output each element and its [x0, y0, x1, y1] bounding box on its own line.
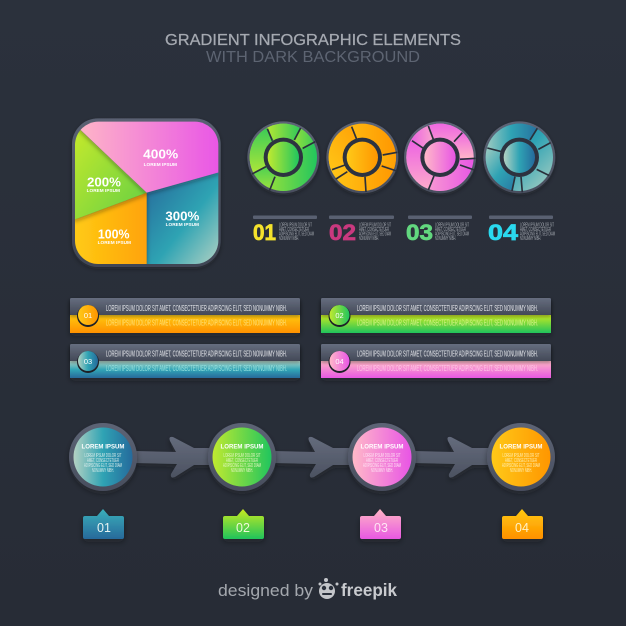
banner 03: LOREM IPSUM DOLOR SIT AMET, CONSECTETUER ADIPISCING ELIT, SED NONUMMY NIBH.: [106, 363, 287, 373]
legend 02: ADIPISCING ELIT, SED DIAM: [359, 232, 391, 238]
tag 02: [223, 509, 264, 539]
tag 03: [360, 509, 401, 539]
banner 02: 02: [335, 311, 344, 320]
legend 03: [406, 216, 472, 245]
panel: pie chart square: [72, 118, 221, 267]
label: 100%: 100%: [98, 227, 129, 241]
step circle 3: ADIPISCING ELIT, SED DIAM: [363, 463, 401, 469]
legend 01: [253, 216, 317, 245]
label: 100%: LOREM IPSUM: [98, 240, 131, 246]
legend 03: LOREM IPSUM DOLOR SIT: [435, 222, 469, 228]
donut 3: [404, 121, 476, 196]
banner 03: LOREM IPSUM DOLOR SIT AMET, CONSECTETUER ADIPISCING ELIT, SED NONUMMY NIBH.: [106, 348, 287, 358]
tag 03: 03: [374, 521, 388, 535]
legend 04: ADIPISCING ELIT, SED DIAM: [520, 232, 555, 238]
tag 02: 02: [236, 521, 250, 535]
step circle 1: [69, 423, 137, 491]
step circle 4: AMET, CONSECTETUER: [505, 458, 537, 464]
tag 04: 04: [515, 521, 529, 535]
arrow 1: [135, 437, 212, 478]
banner 01: [70, 298, 300, 333]
banner 04: 04: [335, 357, 344, 366]
banner 01: 01: [84, 311, 92, 320]
title: GRADIENT INFOGRAPHIC ELEMENTS: [165, 32, 461, 49]
step circle 1: NONUMMY NIBH.: [92, 468, 114, 474]
legend 02: LOREM IPSUM DOLOR SIT: [359, 222, 391, 228]
label: 400%: 400%: [143, 147, 178, 161]
legend 01: AMET, CONSECTETUER: [279, 227, 309, 233]
legend 02: 02: [329, 220, 356, 245]
footer credit: designed by: [218, 581, 314, 600]
step circle 1: LOREM IPSUM DOLOR SIT: [84, 453, 122, 459]
legend 04: 04: [488, 220, 519, 245]
step circle 4: LOREM IPSUM: [500, 444, 542, 450]
legend 04: [488, 216, 555, 245]
label: 200%: 200%: [87, 175, 121, 189]
step circle 3: LOREM IPSUM DOLOR SIT: [364, 453, 400, 459]
icon: freepik mascot: [318, 578, 338, 599]
label: 300%: LOREM IPSUM: [166, 222, 199, 228]
legend 01: LOREM IPSUM DOLOR SIT: [279, 222, 312, 228]
step circle 4: LOREM IPSUM DOLOR SIT: [502, 453, 540, 459]
step circle 3: LOREM IPSUM: [360, 444, 404, 450]
title: WITH DARK BACKGROUND: [206, 49, 420, 66]
step circle 2: LOREM IPSUM: [220, 444, 264, 450]
step circle 2: AMET, CONSECTETUER: [226, 458, 258, 464]
step circle 4: NONUMMY NIBH.: [510, 468, 532, 474]
banner 03: [70, 344, 300, 378]
tag 01: [83, 509, 124, 539]
legend 04: AMET, CONSECTETUER: [520, 227, 551, 233]
legend 03: AMET, CONSECTETUER: [435, 227, 466, 233]
legend 02: NONUMMY NIBH.: [359, 236, 379, 242]
step circle 3: AMET, CONSECTETUER: [366, 458, 398, 464]
banner 01: LOREM IPSUM DOLOR SIT AMET, CONSECTETUER ADIPISCING ELIT, SED NONUMMY NIBH.: [106, 303, 287, 313]
donut 2: [323, 121, 403, 193]
step circle 1: LOREM IPSUM: [82, 444, 124, 450]
slice: 200%: [73, 123, 147, 220]
donut 4: [481, 120, 555, 198]
donut 1: [243, 121, 322, 198]
banner 01: LOREM IPSUM DOLOR SIT AMET, CONSECTETUER ADIPISCING ELIT, SED NONUMMY NIBH.: [106, 318, 287, 328]
step circle 2: LOREM IPSUM DOLOR SIT: [224, 453, 260, 459]
label: 200%: LOREM IPSUM: [87, 188, 120, 194]
step circle 4: [487, 423, 555, 491]
legend 01: ADIPISCING ELIT, SED DIAM: [279, 232, 314, 238]
panel: four donut rings: [243, 120, 555, 198]
footer credit: [218, 578, 397, 600]
step circle 1: AMET, CONSECTETUER: [87, 458, 119, 464]
slice: 100%: [73, 193, 147, 265]
legend 03: NONUMMY NIBH.: [435, 236, 456, 242]
legend 01: NONUMMY NIBH.: [279, 236, 299, 242]
arrow 2: [274, 437, 351, 478]
step circle 3: NONUMMY NIBH.: [371, 468, 393, 474]
banner 02: [321, 298, 551, 333]
tag 04: [502, 509, 543, 539]
legend 04: LOREM IPSUM DOLOR SIT: [520, 222, 554, 228]
banner 03: 03: [84, 357, 92, 366]
slice: 400%: [73, 120, 220, 193]
legend 01: 01: [253, 220, 276, 245]
title: [165, 32, 461, 66]
footer credit: freepik: [341, 580, 397, 600]
tag 01: 01: [97, 521, 111, 535]
legend 03: 03: [406, 220, 433, 245]
label: 400%: [143, 147, 178, 168]
step circle 3: [348, 423, 416, 491]
banner 04: [321, 344, 551, 378]
step circle 1: ADIPISCING ELIT, SED DIAM: [84, 463, 122, 469]
legend 02: [329, 216, 394, 245]
step circle 2: NONUMMY NIBH.: [231, 468, 253, 474]
step circle 2: [208, 423, 276, 491]
step circle 2: ADIPISCING ELIT, SED DIAM: [223, 463, 261, 469]
legend 04: NONUMMY NIBH.: [520, 236, 541, 242]
legend 02: AMET, CONSECTETUER: [359, 227, 389, 233]
slice: 300%: [147, 172, 220, 265]
label: 400%: LOREM IPSUM: [144, 162, 177, 168]
label: 300%: 300%: [165, 209, 199, 223]
step circle 4: ADIPISCING ELIT, SED DIAM: [502, 463, 540, 469]
legend 03: ADIPISCING ELIT, SED DIAM: [435, 232, 469, 238]
arrow 3: [414, 437, 490, 478]
